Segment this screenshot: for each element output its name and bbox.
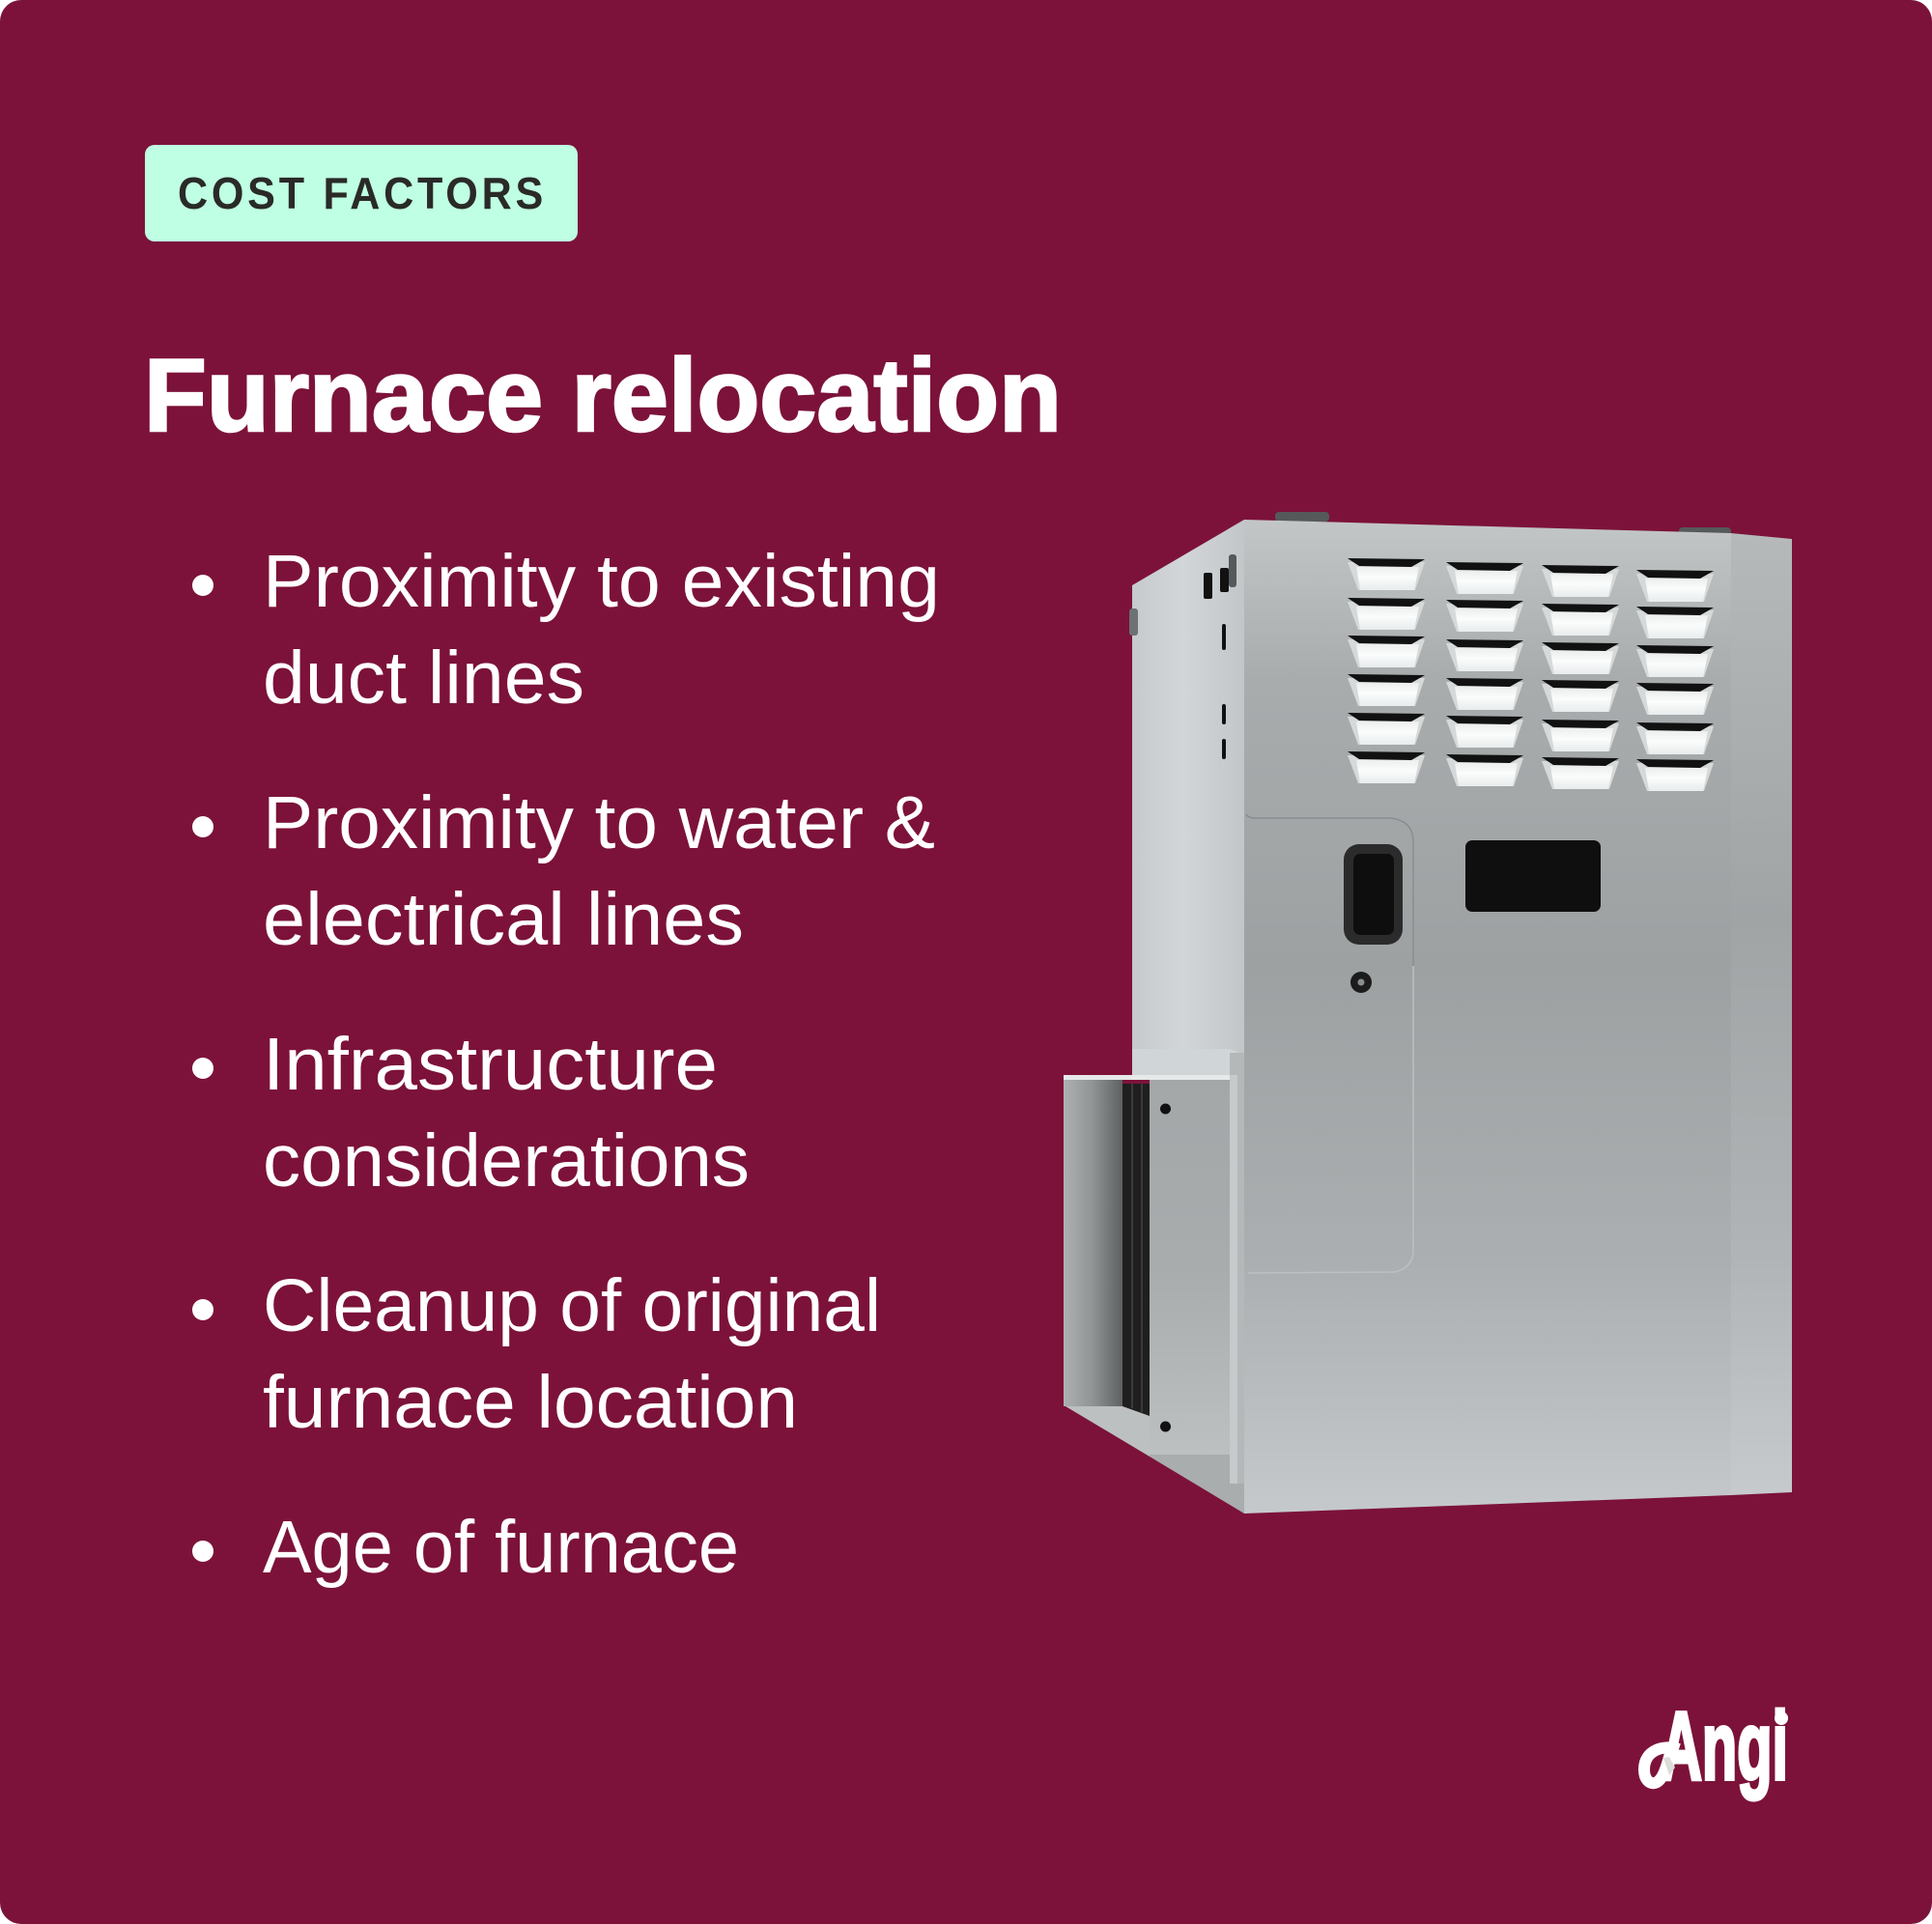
logo: Angi	[1644, 1692, 1788, 1800]
list item: duct lines: Proximity to existing	[263, 540, 940, 623]
title: Furnace relocation	[144, 337, 1062, 453]
logo: Angi: Angi	[1661, 1692, 1788, 1800]
list item: infrastructure: Infrastructure	[263, 1023, 718, 1106]
door outline	[1246, 814, 1413, 1273]
duct collar on side	[1132, 1049, 1244, 1075]
bullet list	[192, 540, 940, 1589]
side intake duct	[1064, 1053, 1244, 1514]
list item: water and electrical: Proximity to water &	[263, 781, 935, 864]
badge: cost factors: COST FACTORS	[178, 168, 547, 218]
furnace illustration	[1064, 512, 1792, 1514]
knob	[1350, 972, 1372, 993]
louvers	[1348, 558, 1714, 791]
list item: cleanup: Cleanup of original	[263, 1264, 881, 1347]
top fittings	[1275, 512, 1731, 536]
list item: duct lines	[192, 540, 940, 720]
right band	[1731, 533, 1792, 1495]
list item: infrastructure: considerations	[263, 1119, 750, 1202]
list item: duct lines: duct lines	[263, 637, 584, 720]
list item: cleanup: furnace location	[263, 1361, 798, 1444]
list item: age: Age of furnace	[263, 1506, 739, 1589]
list item: infrastructure	[192, 1023, 750, 1202]
list item: water and electrical: electrical lines	[263, 878, 744, 961]
side face	[1132, 520, 1244, 1055]
display window	[1465, 840, 1601, 912]
list item: water and electrical	[192, 781, 935, 961]
badge: cost factors	[145, 145, 578, 241]
door handle	[1344, 844, 1403, 945]
side face details	[1129, 554, 1236, 759]
front face	[1244, 520, 1731, 1514]
list item: cleanup	[192, 1264, 881, 1444]
